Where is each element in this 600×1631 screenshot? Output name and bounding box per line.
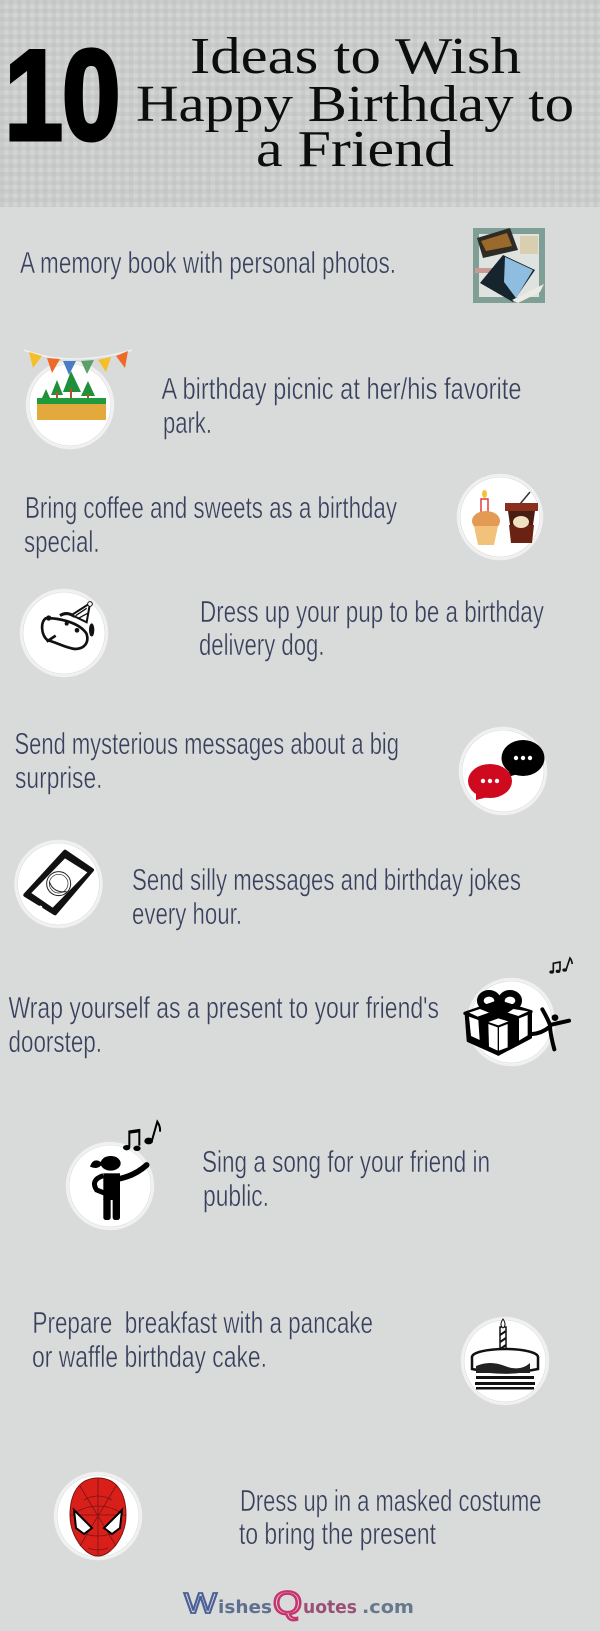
icon: gift and dancer (465, 958, 572, 1065)
title: Ideas to Wish (190, 28, 521, 85)
item 7 text: Wrap yourself as a present to your friend's (8, 990, 439, 1025)
footer logo: WishesQuotes.com: ishes (218, 1597, 272, 1618)
item 2 text: park. (163, 405, 212, 440)
footer logo: WishesQuotes.com: W (184, 1588, 218, 1620)
footer logo: WishesQuotes.com: .com (362, 1597, 414, 1618)
icon: park with bunting (24, 350, 132, 448)
item 3 text (24, 490, 397, 559)
icon: singer with music notes (67, 1122, 160, 1229)
item 1 text: A memory book with personal photos. (20, 245, 396, 280)
item 7 text (8, 990, 439, 1059)
item 5 text: Send mysterious messages about a big (14, 726, 399, 761)
item 10 text (239, 1483, 542, 1551)
footer logo: WishesQuotes.com (184, 1585, 414, 1621)
item 9 text: Prepare breakfast with a pancake (32, 1305, 373, 1340)
item 9 text: or waffle birthday cake. (32, 1339, 267, 1374)
item 5 text (14, 726, 399, 795)
title: a Friend (256, 121, 454, 178)
title (136, 28, 574, 178)
icon: birthday cake (462, 1318, 548, 1404)
item 4 text (199, 594, 544, 662)
item 9 text (32, 1305, 373, 1374)
item 7 text: doorstep. (8, 1024, 102, 1059)
item 2 text (162, 371, 522, 440)
item 10 text: to bring the present (239, 1516, 436, 1551)
item 8 text: Sing a song for your friend in (202, 1144, 490, 1179)
header panel (0, 0, 600, 207)
icon: memory book photos (473, 228, 545, 303)
footer logo: WishesQuotes.com: uotes (303, 1597, 357, 1618)
item 5 text: surprise. (15, 760, 102, 795)
item 6 text (132, 862, 521, 931)
icon: spider mask (55, 1473, 141, 1559)
item 8 text: public. (203, 1178, 269, 1213)
item 6 text: every hour. (132, 896, 242, 931)
icon: phone with emoji (16, 841, 102, 927)
big number 10: 10 (5, 24, 120, 166)
icon: chat bubbles (460, 728, 546, 814)
icon: dog with party hat (21, 590, 107, 676)
footer logo: WishesQuotes.com: Q (273, 1585, 302, 1621)
item 3 text: Bring coffee and sweets as a birthday (25, 490, 397, 525)
icon: cupcake and coffee (458, 475, 542, 559)
title: Happy Birthday to (136, 76, 574, 133)
item 8 text (202, 1144, 490, 1213)
item 3 text: special. (24, 524, 100, 559)
item 4 text: delivery dog. (199, 627, 324, 662)
